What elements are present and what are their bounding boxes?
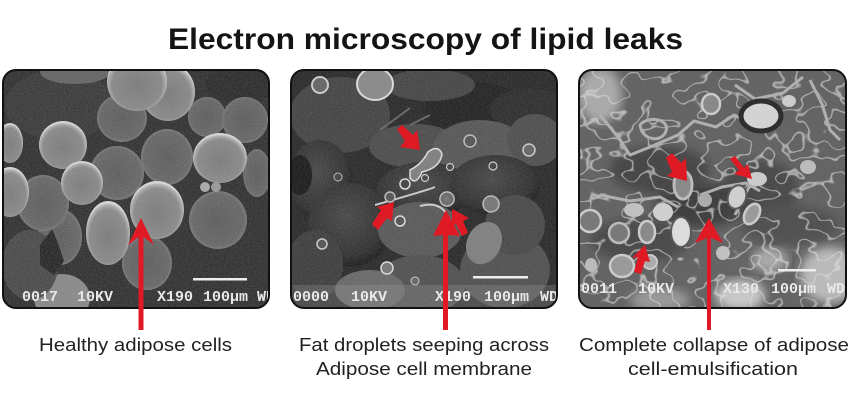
arrow: collapse pointer bottom <box>632 245 650 274</box>
caption: collapse: Complete collapse of adipose <box>579 335 849 355</box>
caption: collapse: cell-emulsification <box>628 359 798 379</box>
micrograph label: WD <box>827 281 845 298</box>
micrograph label: 0011 <box>581 281 617 298</box>
micrograph label: 100µm <box>771 281 816 298</box>
micrograph label: WD <box>257 289 275 306</box>
micrograph label: 0017 <box>22 289 58 306</box>
scale bar <box>778 269 816 272</box>
arrow: collapse pointer right <box>730 156 752 179</box>
caption: healthy: Healthy adipose cells <box>39 335 232 355</box>
arrow: droplet pointer top <box>397 125 420 150</box>
panel: healthy adipose cells micrograph <box>2 69 270 309</box>
caption: collapse <box>579 335 849 379</box>
arrow: collapse main <box>695 218 723 330</box>
caption: fat droplets: Fat droplets seeping across <box>299 335 549 355</box>
scale bar <box>473 276 528 278</box>
micrograph label: 10KV <box>351 289 387 306</box>
arrow: healthy cells <box>128 218 154 330</box>
panel: fat droplets micrograph <box>287 68 570 315</box>
micrograph label: 100µm <box>203 289 248 306</box>
scale bar <box>193 278 247 280</box>
micrograph label: X190 <box>157 289 193 306</box>
micrograph label: 100µm <box>484 289 529 306</box>
panel: cell collapse micrograph <box>578 67 850 312</box>
micrograph label: 10KV <box>638 281 674 298</box>
arrow: droplet pointer right <box>452 209 469 236</box>
arrow: collapse pointer left <box>666 153 687 181</box>
micrograph label: X190 <box>435 289 471 306</box>
micrograph label: WD <box>540 289 558 306</box>
arrow: fat droplets main <box>433 210 460 330</box>
micrograph label: 10KV <box>77 289 113 306</box>
arrow: droplet pointer left <box>372 202 394 230</box>
caption: fat droplets <box>299 335 549 379</box>
caption: fat droplets: Adipose cell membrane <box>316 359 532 379</box>
micrograph label: 0000 <box>293 289 329 306</box>
micrograph label: X130 <box>723 281 759 298</box>
title: Electron microscopy of lipid leaks <box>168 23 683 56</box>
